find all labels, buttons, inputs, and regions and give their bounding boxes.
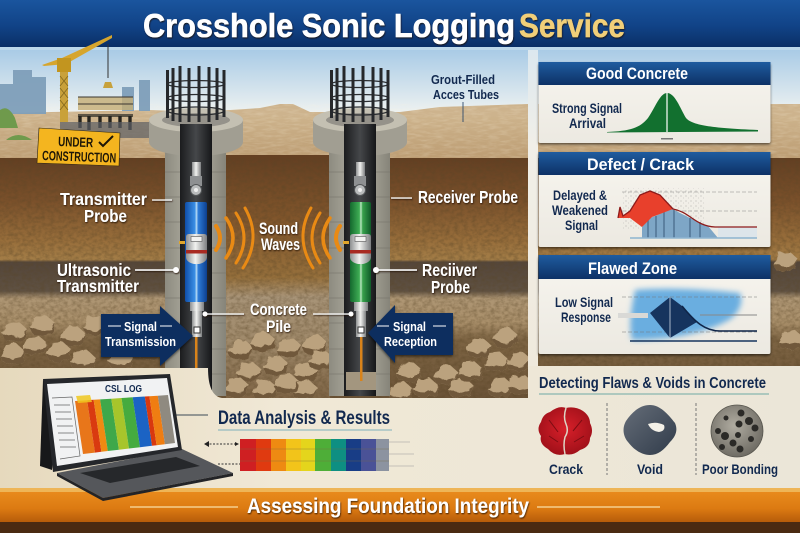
arrow: signal transmission	[101, 306, 193, 366]
header: good concrete: Good Concrete	[586, 64, 688, 83]
sign: under construction	[37, 128, 120, 166]
header: flawed zone: Flawed Zone	[588, 259, 677, 278]
right pile	[313, 66, 407, 396]
grout plug	[346, 372, 376, 390]
chart: strong signal peak	[607, 93, 758, 140]
label: void: Void	[637, 461, 663, 477]
label: grout-filled access tubes	[431, 72, 499, 122]
construction site background	[0, 50, 800, 402]
text: strong signal arrival: Arrival	[569, 115, 606, 131]
label: poor bonding: Poor Bonding	[702, 461, 778, 477]
panel: flawed zone	[538, 255, 770, 354]
sign: under construction: UNDER	[58, 134, 94, 150]
colour log	[75, 395, 175, 454]
label: reciiver probe	[373, 260, 477, 297]
text: delayed and weakened signal: Delayed &	[553, 187, 607, 203]
footer text: Assessing Foundation Integrity	[247, 495, 529, 518]
label: concrete pile: Pile	[266, 317, 291, 336]
label: receiver probe: Receiver Probe	[418, 187, 518, 207]
header: defect crack	[538, 152, 770, 175]
heading: detecting flaws and voids: Detecting Flaws & Voids in Concrete	[539, 375, 766, 392]
dividers	[607, 403, 696, 475]
label: transmitter probe: Probe	[84, 206, 127, 226]
label: sound waves: Sound	[259, 220, 298, 238]
header banner	[0, 0, 800, 50]
label: reciiver probe: Reciiver	[422, 260, 477, 280]
arrow: signal reception: Signal	[393, 319, 426, 334]
arrow: signal reception	[368, 305, 453, 363]
label: crack: Crack	[549, 461, 583, 477]
label: grout-filled access tubes: Grout-Filled	[431, 72, 495, 87]
icon: crack	[538, 407, 592, 455]
panel: good concrete	[538, 62, 770, 143]
label: concrete pile: Concrete	[250, 300, 307, 319]
receiver probe	[343, 162, 371, 381]
sign: under construction: CONSTRUCTION	[42, 148, 116, 166]
label: sound waves	[259, 220, 300, 254]
construction platform	[60, 97, 150, 138]
rubble	[0, 252, 800, 402]
label: ultrasonic transmitter	[57, 260, 179, 296]
soil layers	[0, 155, 800, 400]
leader line	[176, 414, 208, 416]
label: ultrasonic transmitter: Ultrasonic	[57, 260, 131, 280]
heading: data analysis and results: Data Analysis & Results	[218, 408, 390, 429]
sound waves	[216, 208, 340, 268]
side strip	[528, 50, 538, 366]
header: defect crack: Defect / Crack	[587, 155, 695, 174]
text: strong signal arrival	[552, 100, 622, 131]
arrow: signal transmission: Transmission	[105, 334, 176, 349]
label: transmitter probe	[60, 189, 172, 226]
icon: void	[624, 405, 676, 455]
text: delayed and weakened signal: Weakened	[552, 202, 608, 218]
paper panel	[0, 366, 800, 489]
text: delayed and weakened signal	[552, 187, 608, 233]
text: strong signal arrival: Strong Signal	[552, 100, 622, 116]
label: transmitter probe: Transmitter	[60, 189, 147, 209]
log table	[52, 397, 80, 459]
footer banner	[0, 488, 800, 533]
label: sound waves: Waves	[261, 236, 300, 254]
laptop	[40, 374, 233, 501]
header: good concrete	[538, 62, 770, 85]
text: delayed and weakened signal: Signal	[565, 217, 598, 233]
label: receiver probe	[391, 187, 518, 207]
city skyline	[0, 70, 150, 114]
title: Crosshole Sonic Logging	[143, 7, 515, 44]
label: ultrasonic transmitter: Transmitter	[57, 276, 139, 296]
label: grout-filled access tubes: Acces Tubes	[433, 87, 499, 102]
arrow: signal transmission: Signal	[124, 319, 157, 334]
panel: defect crack	[538, 152, 770, 247]
screen	[43, 374, 182, 472]
arrow: signal reception: Reception	[384, 334, 437, 349]
dashed arrows to colour scale	[204, 441, 240, 464]
label: concrete pile	[202, 300, 354, 336]
chart: weakened signal	[618, 188, 757, 238]
colour scale	[240, 439, 414, 471]
keyboard base	[57, 449, 233, 498]
text: low signal response: Response	[561, 309, 611, 325]
laptop: CSL LOG	[105, 384, 142, 395]
transmitter probe	[179, 162, 207, 397]
label: reciiver probe: Probe	[431, 277, 470, 297]
title: Service	[519, 7, 625, 44]
icon: poor bonding	[711, 405, 763, 457]
header: flawed zone	[538, 255, 770, 279]
text: low signal response: Low Signal	[555, 294, 613, 310]
green shrubs	[0, 108, 32, 140]
tablet stand	[40, 380, 58, 470]
chart: low signal response	[618, 289, 757, 341]
text: low signal response	[555, 294, 613, 325]
tower crane	[42, 35, 113, 122]
left pile	[149, 66, 243, 397]
